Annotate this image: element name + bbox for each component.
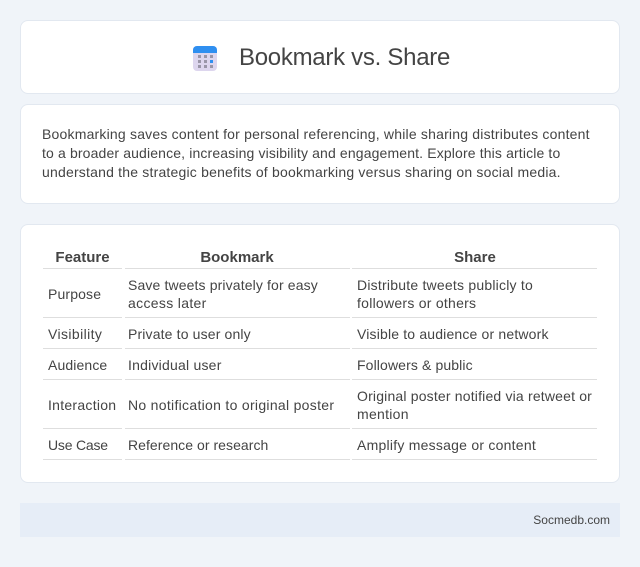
intro text — [42, 126, 590, 180]
row: audience: Individual user — [128, 357, 222, 373]
row: purpose: Save tweets privately for easy — [128, 277, 318, 293]
row: visibility: Visibility — [48, 326, 102, 342]
header row: Feature — [55, 249, 110, 266]
row: visibility: Private to user only — [128, 326, 251, 342]
row: purpose: Purpose — [48, 286, 101, 302]
row: audience: Followers & public — [357, 357, 473, 373]
row: use case — [48, 437, 536, 453]
row: purpose: Distribute tweets publicly to — [357, 277, 533, 293]
row: interaction: mention — [357, 406, 409, 422]
row: interaction: No notification to original poster — [128, 397, 334, 413]
table — [43, 249, 597, 460]
row: use case: Use Case — [48, 437, 108, 453]
row: purpose — [48, 277, 533, 311]
row: interaction: Interaction — [48, 397, 116, 413]
row: visibility: Visible to audience or network — [357, 326, 549, 342]
row: use case: Amplify message or content — [357, 437, 536, 453]
header row: Bookmark — [200, 249, 274, 266]
row: audience — [48, 357, 473, 373]
header row — [55, 249, 496, 266]
footer bar — [20, 503, 620, 537]
intro text: understand the strategic benefits of bookmarking versus sharing on social media. — [42, 164, 561, 180]
row: visibility — [48, 326, 549, 342]
row: purpose: followers or others — [357, 295, 476, 311]
row: interaction — [48, 388, 592, 422]
intro text: Bookmarking saves content for personal referencing, while sharing distributes content — [42, 126, 590, 142]
header row: Share — [454, 249, 496, 266]
row: interaction: Original poster notified via retweet or — [357, 388, 592, 404]
footer text: Socmedb.com — [533, 513, 610, 527]
panel: introduction — [20, 104, 620, 204]
row: audience: Audience — [48, 357, 107, 373]
panel: title card — [20, 20, 620, 94]
intro text: to a broader audience, increasing visibility and engagement. Explore this article to — [42, 145, 560, 161]
row: purpose: access later — [128, 295, 207, 311]
icon: calendar — [193, 46, 217, 71]
panel: comparison table — [20, 224, 620, 483]
title: Bookmark vs. Share — [239, 44, 450, 71]
row: use case: Reference or research — [128, 437, 268, 453]
